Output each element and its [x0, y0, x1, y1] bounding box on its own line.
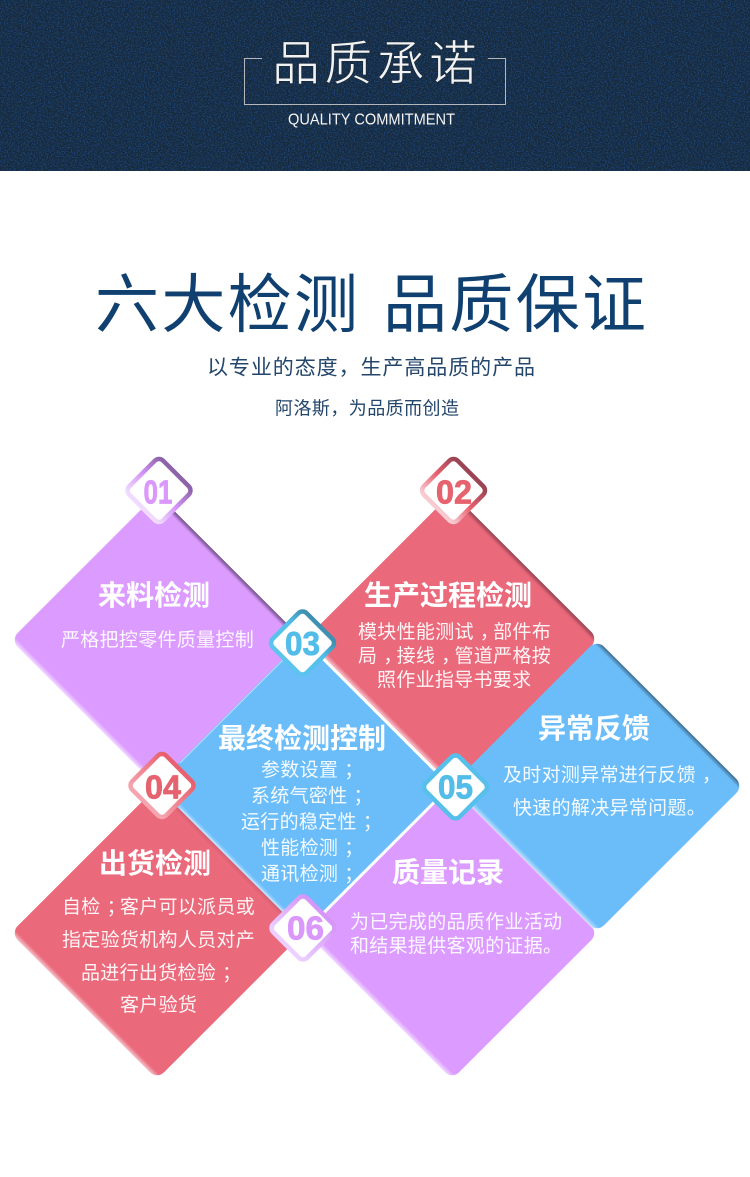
header title: 品质承诺 [272, 24, 477, 94]
body text [241, 755, 382, 886]
body text: 指定验货机构人员对产 [62, 925, 255, 952]
main title [95, 254, 646, 346]
panel: 03 final inspection [156, 640, 448, 932]
heading: 最终检测控制 [218, 717, 386, 757]
heading: 来料检测 [98, 574, 210, 614]
badge: 05: 05 [438, 768, 473, 806]
body text: 和结果提供客观的证据。 [350, 931, 562, 958]
body text [503, 760, 721, 820]
heading: 异常反馈 [538, 707, 650, 747]
panel: 05 exception feedback [451, 640, 743, 932]
body text: 模块性能测试 ，部件布 [358, 617, 551, 644]
header subtitle: QUALITY COMMITMENT [288, 112, 455, 128]
main title: 六大检测 [95, 254, 358, 346]
badge: 02 [420, 457, 487, 524]
badge: 06 [269, 894, 337, 962]
body text: 参数设置 ； [261, 755, 364, 782]
body text [358, 617, 551, 692]
badge: 04: 04 [145, 768, 182, 806]
badge: 04 [128, 752, 196, 819]
badge: 05 [422, 753, 489, 821]
body text: 运行的稳定性 ； [241, 807, 382, 834]
panel: 01 incoming inspection [11, 494, 303, 786]
body text: 快速的解决异常问题。 [513, 793, 706, 820]
header title frame [244, 58, 506, 104]
body text: 客户验货 [120, 990, 197, 1017]
panel: 06 quality records [306, 787, 598, 1079]
body text: 及时对测异常进行反馈 ， [503, 760, 721, 787]
heading: 出货检测 [99, 842, 211, 882]
heading: 质量记录 [392, 851, 504, 891]
panel: 04 outgoing inspection [11, 787, 303, 1079]
body text [350, 907, 562, 958]
tagline: 阿洛斯，为品质而创造 [275, 394, 459, 420]
subtitle line: 以专业的态度，生产高品质的产品 [207, 352, 535, 382]
main title: 品质保证 [383, 254, 646, 346]
body text: 局 ，接线 ，管道严格按 [358, 641, 551, 668]
heading: 生产过程检测 [364, 574, 532, 614]
gap filler between panels 02 and 05 [470, 649, 590, 769]
body text: 通讯检测 ； [261, 859, 364, 886]
header banner [0, 0, 750, 171]
badge: 01 [125, 457, 193, 524]
body text [62, 892, 255, 1017]
badge: 06: 06 [287, 910, 324, 946]
badge: 02: 02 [436, 474, 472, 510]
body text: 严格把控零件质量控制 [61, 625, 254, 652]
body text: 品进行出货检验 ； [81, 958, 241, 985]
badge: 03: 03 [285, 625, 320, 662]
body text: 性能检测 ； [261, 833, 364, 860]
body text: 自检 ；客户可以派员或 [62, 892, 255, 919]
body text: 系统气密性 ； [251, 781, 373, 808]
body text: 照作业指导书要求 [377, 665, 531, 692]
body text: 为已完成的品质作业活动 [350, 907, 562, 934]
badge: 01: 01 [144, 474, 172, 510]
panel: 02 production process inspection [306, 493, 598, 785]
badge: 03 [269, 609, 336, 677]
